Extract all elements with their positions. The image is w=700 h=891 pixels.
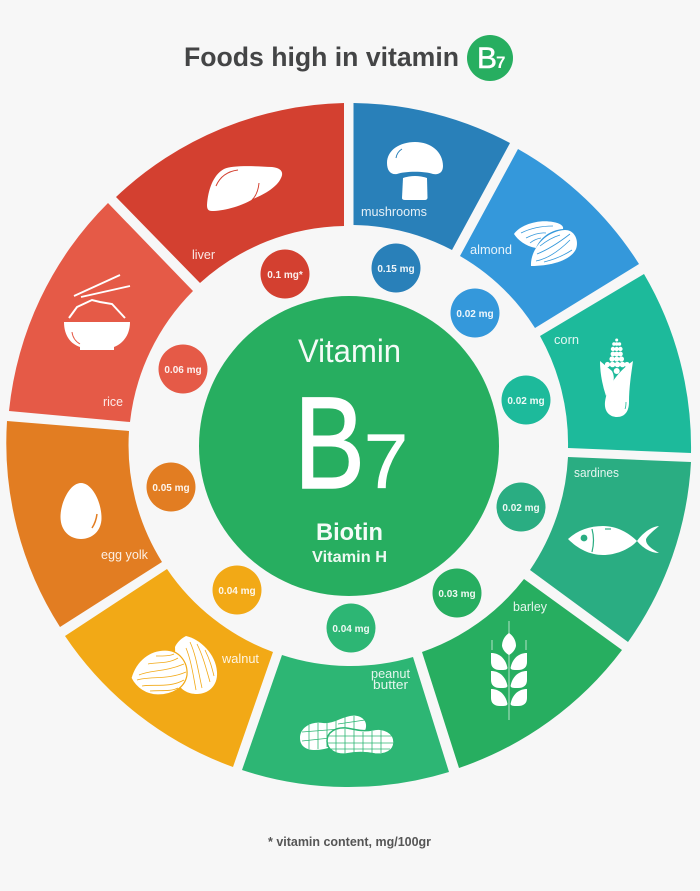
- badge: rice: [158, 344, 208, 394]
- icon: mushroom: [387, 142, 443, 200]
- badge: liver: [260, 250, 310, 298]
- segment: rice: rice: [103, 395, 123, 409]
- badge: peanut butter: [326, 604, 376, 652]
- badge: egg yolk: [146, 462, 196, 512]
- badge: peanut butter: 0.04 mg: [332, 624, 370, 635]
- segment: sardines: [530, 457, 691, 642]
- title: Foods high in vitamin: [184, 42, 459, 72]
- segment: rice: [9, 203, 193, 422]
- icon: egg: [60, 483, 102, 539]
- icon: corn: [600, 338, 633, 417]
- badge: almond: [450, 288, 500, 338]
- footnote: * vitamin content, mg/100gr: [268, 834, 431, 849]
- label: peanut butter: butter: [373, 678, 408, 692]
- segment: corn: [540, 274, 691, 453]
- segment: egg yolk: egg yolk: [101, 548, 149, 562]
- segment: almond: almond: [470, 243, 512, 257]
- centre circle: vitamin B7: [199, 296, 499, 596]
- badge: barley: 0.03 mg: [438, 589, 476, 600]
- icon: B7 badge: 7: [496, 53, 505, 72]
- centre circle: vitamin B7: Biotin: [316, 519, 383, 546]
- centre circle: vitamin B7: 7: [364, 419, 408, 505]
- segment: mushrooms: mushrooms: [361, 205, 427, 219]
- segment: walnut: [65, 569, 273, 767]
- badge: sardines: 0.02 mg: [502, 503, 540, 514]
- badge: almond: 0.02 mg: [456, 309, 494, 320]
- badge: corn: [502, 376, 550, 424]
- segment: liver: [116, 103, 344, 283]
- centre circle: vitamin B7: Vitamin H: [312, 549, 387, 566]
- label: peanut butter: [371, 667, 411, 692]
- label: peanut butter: peanut: [371, 667, 411, 681]
- donut ring of food segments: [6, 103, 691, 787]
- badge: mushrooms: [372, 244, 420, 292]
- value badges: [146, 244, 550, 652]
- badge: rice: 0.06 mg: [164, 365, 202, 376]
- badge: sardines: [496, 482, 546, 532]
- segment: liver: liver: [192, 248, 215, 262]
- badge: egg yolk: 0.05 mg: [152, 483, 190, 494]
- icon: almond: [514, 221, 577, 266]
- segment: egg yolk: [6, 421, 162, 627]
- icon: fish: [568, 526, 659, 555]
- badge: walnut: 0.04 mg: [218, 586, 256, 597]
- segment: barley: barley: [513, 600, 548, 614]
- badge: walnut: [212, 566, 262, 614]
- centre circle: vitamin B7: Vitamin: [298, 333, 401, 369]
- badge: mushrooms: 0.15 mg: [377, 264, 415, 275]
- icon: B7 badge: [467, 35, 513, 81]
- icon: liver: [207, 166, 282, 211]
- icon: walnut: [131, 636, 217, 695]
- title: [184, 35, 513, 81]
- badge: liver: 0.1 mg*: [267, 270, 303, 281]
- centre circle: vitamin B7: B: [294, 369, 365, 516]
- segment: peanut butter: [242, 655, 449, 787]
- icon: peanuts: [300, 716, 394, 754]
- badge: barley: [432, 568, 482, 618]
- segment: mushrooms: [354, 103, 510, 250]
- badge: corn: 0.02 mg: [507, 396, 545, 407]
- segment: almond: [460, 149, 639, 328]
- segment: barley: [422, 579, 622, 768]
- segment: corn: corn: [554, 333, 579, 347]
- segment: walnut: walnut: [221, 652, 260, 666]
- icon: rice bowl: [64, 275, 130, 350]
- icon: B7 badge: B: [477, 42, 497, 75]
- icon: barley: [491, 621, 527, 720]
- segment: sardines: sardines: [574, 466, 619, 480]
